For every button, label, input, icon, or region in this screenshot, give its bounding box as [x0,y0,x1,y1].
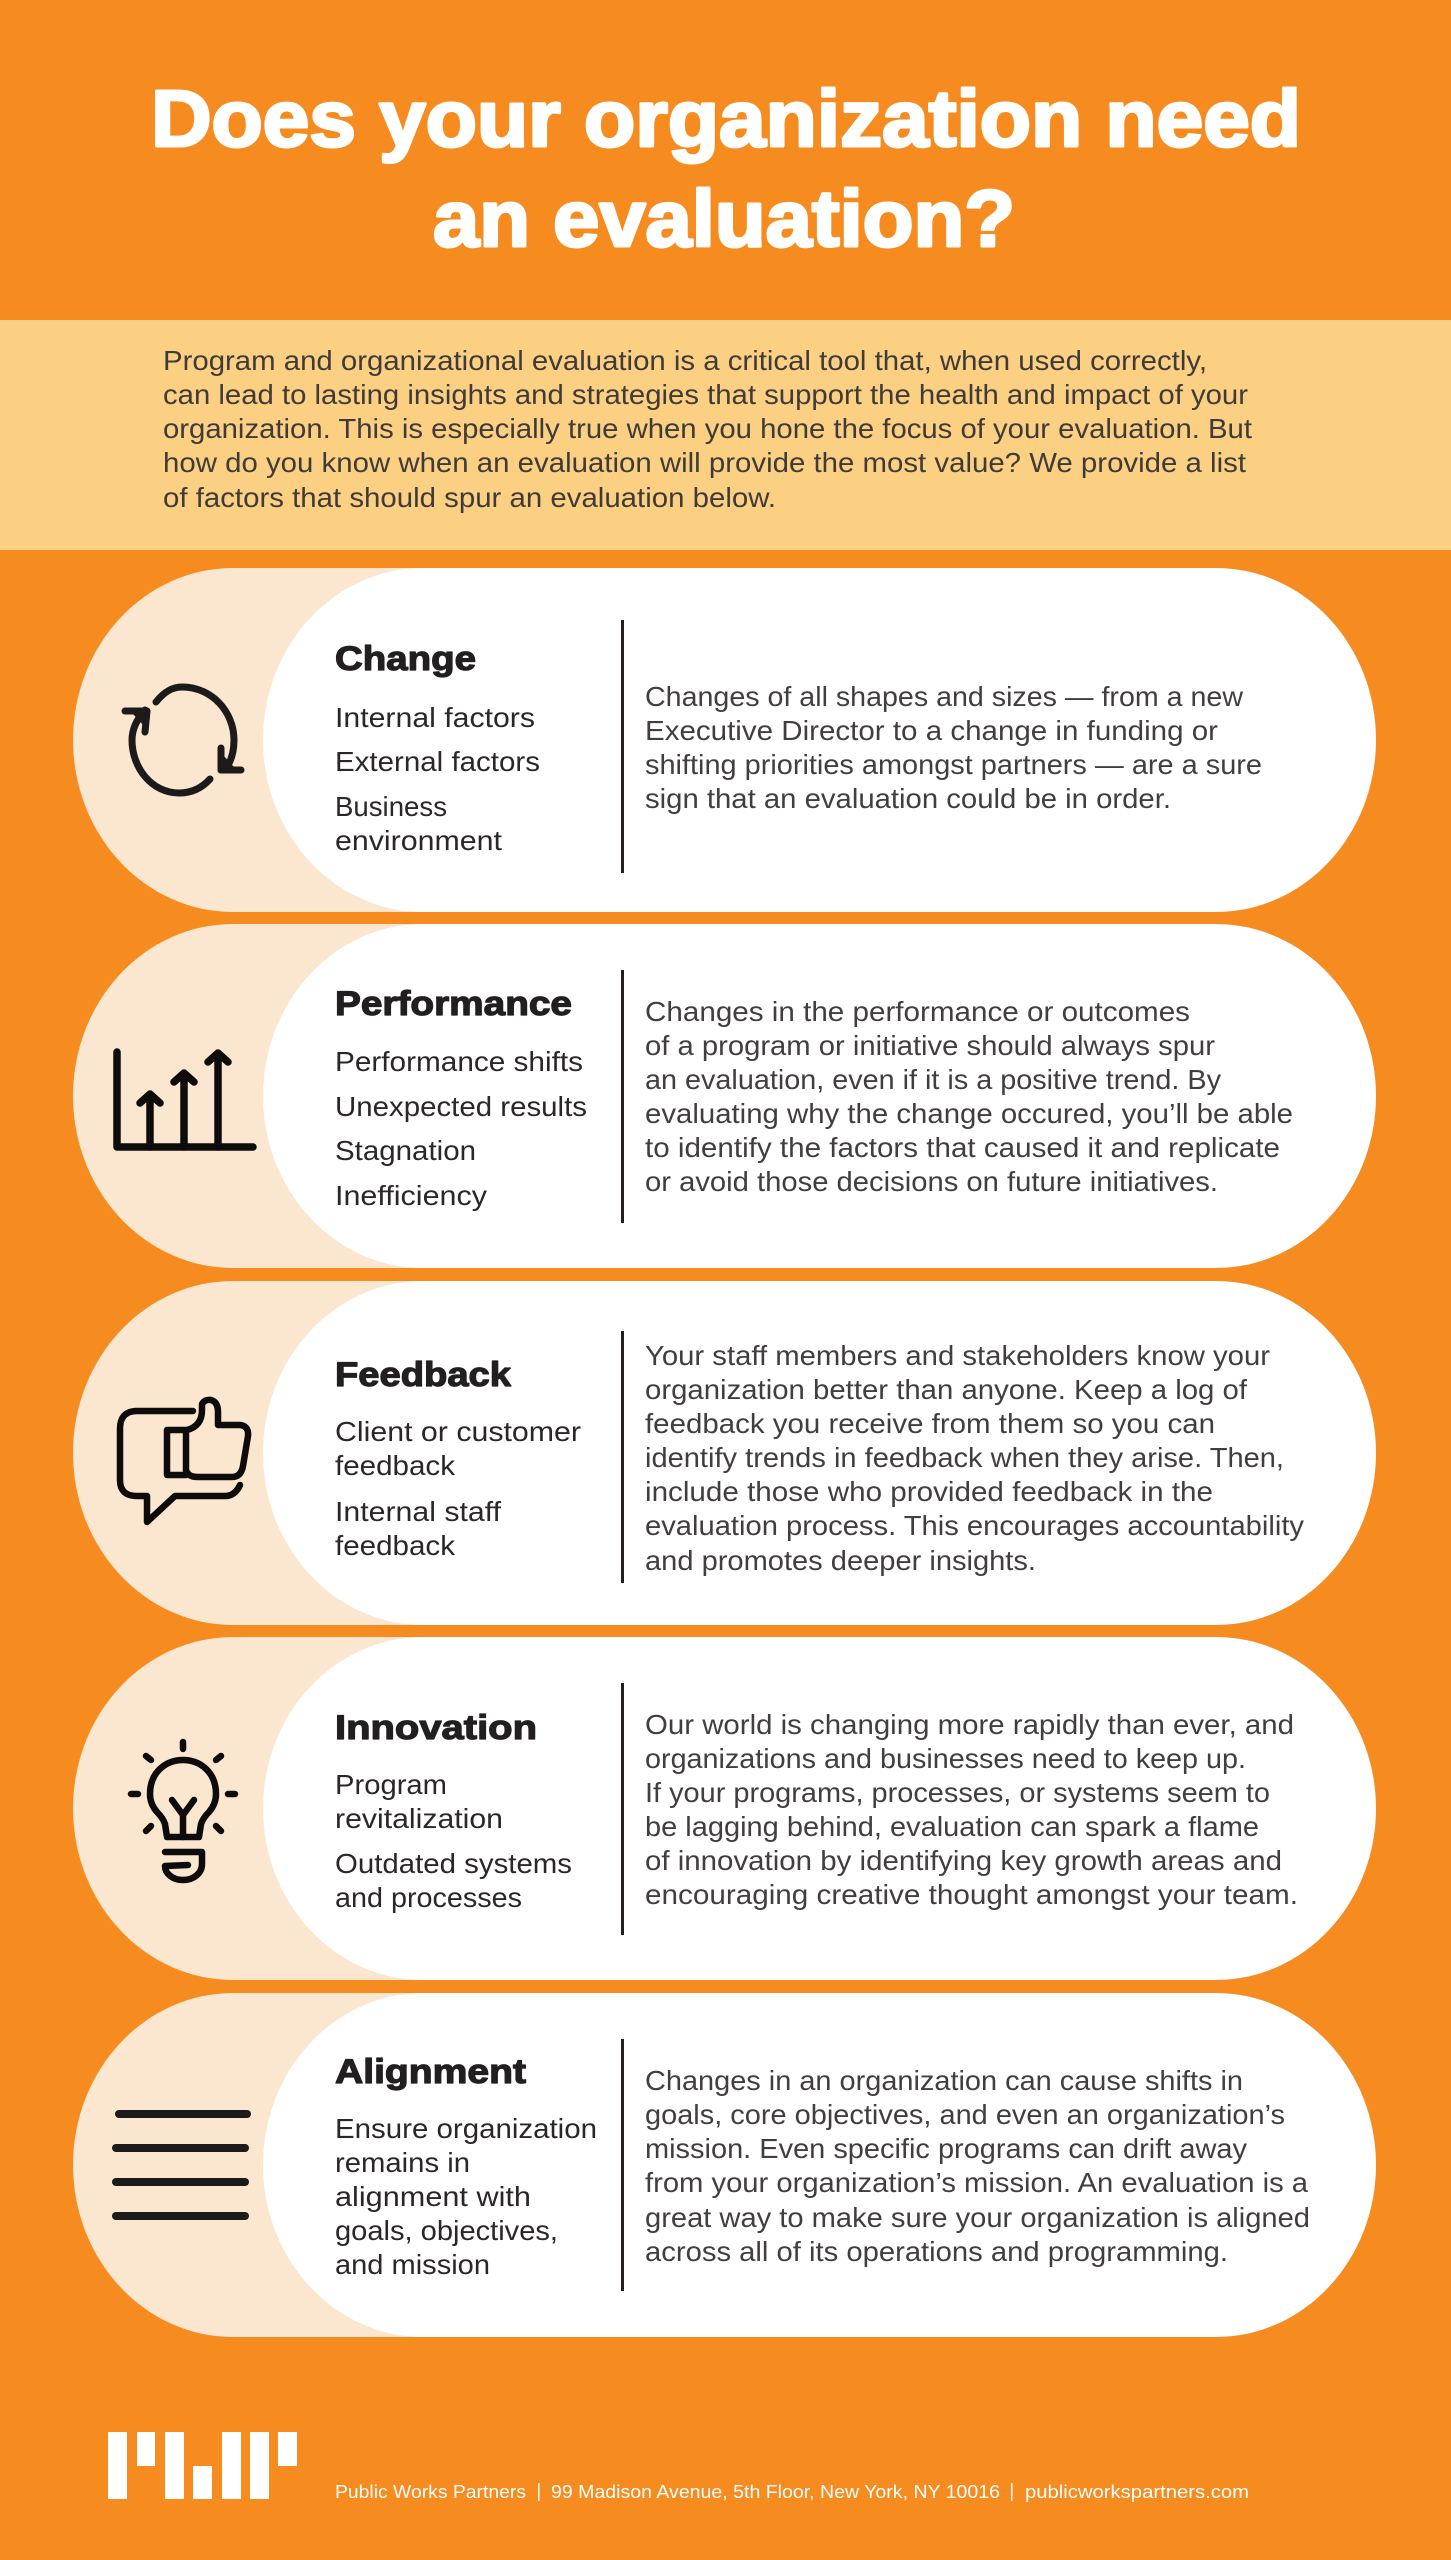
description: or avoid those decisions on future initiatives. [645,1166,1218,1197]
pill foreground [263,568,1376,912]
factor list [335,2113,597,2280]
description: mission. Even specific programs can drift away [645,2133,1247,2164]
heading: Change [335,640,476,678]
description [645,1340,1304,1576]
description: great way to make sure your organization is aligned [645,2202,1310,2233]
footer contact line: 99 Madison Avenue, 5th Floor, New York, NY 10016 [551,2481,1000,2502]
factor list: Internal factors [335,702,535,733]
heading: Innovation [335,1709,537,1747]
factor list: environment [335,825,502,856]
description: an evaluation, even if it is a positive trend. By [645,1064,1221,1095]
panel: feedback [73,1281,1376,1625]
factor list [335,1769,572,1913]
factor list: External factors [335,746,540,777]
description: to identify the factors that caused it and replicate [645,1132,1280,1163]
icon: speech bubble with thumbs up [120,1400,248,1522]
factor list: Business [335,791,447,822]
description: shifting priorities amongst partners — are a sure [645,749,1262,780]
title: an evaluation? [433,174,1015,263]
factor list: Ensure organization [335,2113,597,2144]
factor list: Outdated systems [335,1848,572,1879]
description: Our world is changing more rapidly than ever, and [645,1709,1294,1740]
pill background [73,1637,773,1980]
description: organization better than anyone. Keep a log of [645,1374,1247,1405]
description: identify trends in feedback when they arise. Then, [645,1442,1284,1473]
description [645,2065,1310,2267]
description: encouraging creative thought amongst your team. [645,1879,1298,1910]
title: Does your organization need [151,74,1301,163]
factor list: Stagnation [335,1135,476,1166]
pill foreground [263,1993,1376,2337]
footer contact line: Public Works Partners [335,2481,526,2502]
pill background [73,568,773,912]
panel: change [73,568,1376,912]
intro band: organization. This is especially true when you hone the focus of your evaluation. But [163,413,1252,444]
description: goals, core objectives, and even an organization’s [645,2099,1285,2130]
factor list: Performance shifts [335,1046,583,1077]
description [645,681,1262,814]
description: Changes of all shapes and sizes — from a new [645,681,1244,712]
factor list: Client or customer [335,1416,581,1447]
factor list: Program [335,1769,447,1800]
pill background [73,1281,773,1625]
description: feedback you receive from them so you can [645,1408,1215,1439]
panel: innovation [73,1637,1376,1980]
factor list [335,1416,581,1561]
description: from your organization’s mission. An evaluation is a [645,2167,1308,2198]
factor list: feedback [335,1530,455,1561]
pill foreground [263,1281,1376,1625]
description: Changes in the performance or outcomes [645,996,1190,1027]
factor list: alignment with [335,2181,531,2212]
heading: Performance [335,985,572,1023]
pill foreground [263,924,1376,1268]
footer contact line [335,2481,1249,2502]
description: sign that an evaluation could be in order. [645,783,1171,814]
title [151,74,1301,263]
description: evaluation process. This encourages accountability [645,1510,1304,1541]
description: Executive Director to a change in funding or [645,715,1218,746]
description [645,996,1293,1197]
intro band [0,320,1451,550]
icon: bar chart arrows [117,1052,253,1147]
factor list: feedback [335,1450,455,1481]
description [645,1709,1298,1910]
panel: alignment [73,1993,1376,2337]
heading: Alignment [335,2053,526,2091]
factor list: Inefficiency [335,1180,487,1211]
description: Your staff members and stakeholders know your [645,1340,1270,1371]
icon: light bulb [131,1742,235,1880]
description: of innovation by identifying key growth areas and [645,1845,1282,1876]
factor list: and processes [335,1882,522,1913]
factor list: Internal staff [335,1496,501,1527]
pill background [73,924,773,1268]
intro band: how do you know when an evaluation will provide the most value? We provide a list [163,447,1246,478]
factor list [335,1046,587,1211]
description: include those who provided feedback in the [645,1476,1213,1507]
description: evaluating why the change occured, you’ll be able [645,1098,1293,1129]
logo: Public Works Partners bars [108,2432,297,2499]
icon: refresh arrows [125,687,241,793]
factor list: and mission [335,2249,490,2280]
factor list: revitalization [335,1803,503,1834]
description: and promotes deeper insights. [645,1545,1036,1576]
description: If your programs, processes, or systems seem to [645,1777,1270,1808]
description: across all of its operations and programming. [645,2236,1228,2267]
description: be lagging behind, evaluation can spark a flame [645,1811,1259,1842]
description: Changes in an organization can cause shifts in [645,2065,1243,2096]
pill background [73,1993,773,2337]
factor list: remains in [335,2147,470,2178]
intro band: Program and organizational evaluation is a critical tool that, when used correctly, [163,345,1207,376]
factor list: Unexpected results [335,1091,587,1122]
factor list: goals, objectives, [335,2215,558,2246]
pill foreground [263,1637,1376,1980]
intro band: of factors that should spur an evaluation below. [163,482,776,513]
factor list [335,702,540,856]
description: of a program or initiative should always spur [645,1030,1215,1061]
panel: performance [73,924,1376,1268]
footer contact line: publicworkspartners.com [1025,2481,1249,2502]
intro band: can lead to lasting insights and strategies that support the health and impact of your [163,379,1248,410]
icon: aligned lines [116,2114,247,2216]
description: organizations and businesses need to keep up. [645,1743,1246,1774]
heading: Feedback [335,1356,511,1394]
